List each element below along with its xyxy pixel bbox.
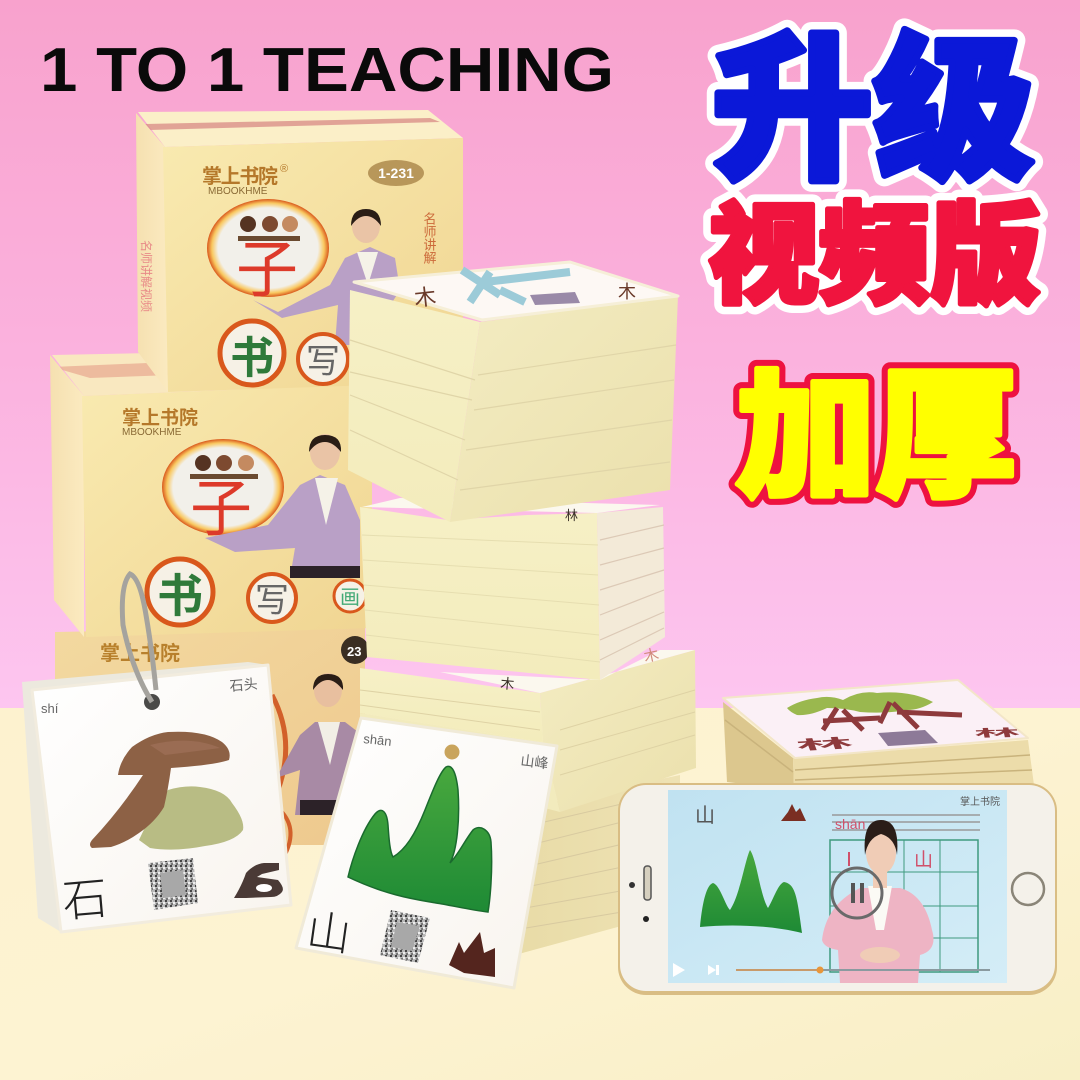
- player controls: [673, 963, 990, 977]
- box: middle product box: [50, 350, 375, 637]
- background: cream table surface: [0, 708, 1080, 1080]
- badge: video edition heading: 视频版: [708, 166, 1041, 326]
- video illustration: mountain: [700, 850, 802, 933]
- badge: thickened heading: 加厚: [735, 325, 1017, 527]
- character circle: 子: [190, 458, 252, 548]
- card stack: second: 林: [565, 505, 578, 524]
- card stack: lowest behind phone: [505, 775, 680, 955]
- QR code: [380, 910, 430, 963]
- flash card: mountain: [296, 718, 557, 988]
- icon: ancient stone glyph: [234, 863, 283, 898]
- phone speaker and camera: [629, 866, 651, 922]
- video screen: 山: [914, 845, 933, 872]
- video screen: 掌上书院: [960, 793, 1000, 808]
- writing grid: [830, 815, 980, 972]
- brand logo: 掌上书院: [122, 403, 198, 430]
- teacher figure: [205, 434, 360, 578]
- picture card on stack: 木: [618, 278, 636, 304]
- pause button: [832, 868, 882, 918]
- title: 1 TO 1 TEACHING: [40, 36, 614, 105]
- small character circles: [220, 321, 348, 386]
- background: pink wall: [0, 0, 1080, 712]
- card stack: second: [360, 498, 665, 680]
- video screen: [668, 790, 1007, 983]
- brand logo: MBOOKHME: [122, 427, 182, 438]
- illustration: mountain: [348, 766, 492, 912]
- box: top product box: [136, 110, 463, 392]
- character circle: [207, 199, 329, 309]
- icon: ancient mountain glyph: [449, 932, 495, 977]
- badge: video edition heading: 视频版: [708, 166, 1041, 326]
- QR code: [148, 858, 198, 910]
- teacher figure on bottom box: [276, 673, 362, 815]
- teacher figure: [253, 209, 400, 345]
- pinyin label: shí: [41, 701, 59, 716]
- phone home button: [1012, 873, 1044, 905]
- presenter: [822, 820, 934, 983]
- small character circles: 书: [230, 322, 274, 386]
- binder hole: [444, 744, 460, 760]
- brand logo: MBOOKHME: [208, 186, 268, 197]
- pinyin label: shān: [363, 731, 392, 749]
- card stack: top with picture card: [348, 262, 678, 522]
- picture card on stack: 木: [412, 279, 438, 313]
- small character circles: 画: [340, 581, 360, 610]
- card stack: third: 木: [500, 673, 515, 694]
- phone showing video lesson: [618, 783, 1057, 995]
- flash card: stone: [22, 662, 291, 932]
- illustration: stone character: [90, 732, 243, 850]
- binder hole: [144, 694, 160, 710]
- box: bottom product box: 掌上书院: [100, 637, 180, 666]
- tree card top: 林: [973, 724, 1022, 740]
- small character circles: 写: [255, 573, 289, 622]
- character circle: [162, 439, 284, 548]
- word label: 石头: [229, 674, 258, 696]
- box: bottom product box: [55, 626, 369, 860]
- brand logo: ®: [280, 163, 288, 175]
- card stack: back right with tree card: [723, 680, 1034, 790]
- tree card top: 林: [793, 733, 856, 754]
- card stack: third: 木: [642, 643, 661, 667]
- card stack: third: [360, 643, 696, 812]
- picture card on stack: [354, 262, 678, 320]
- box: bottom product box: 23: [347, 644, 361, 659]
- small character circles: [147, 559, 366, 626]
- small character circles: 书: [157, 560, 203, 626]
- badge: thickened heading: 加厚: [735, 325, 1017, 527]
- tag: range number: 1-231: [378, 165, 414, 181]
- metal ring: [122, 574, 156, 702]
- video screen: shān: [835, 816, 865, 832]
- video screen: 山: [695, 799, 715, 828]
- word label: 山峰: [519, 750, 550, 773]
- character circle: 子: [236, 219, 298, 309]
- character: mountain: 山: [303, 894, 356, 964]
- brand logo: [202, 160, 288, 197]
- side caption: 名师讲解: [420, 211, 440, 265]
- box: top product box: 名师讲解视频: [138, 240, 155, 312]
- tag: range number: [368, 160, 424, 186]
- brand logo: 掌上书院: [202, 160, 278, 189]
- small character circles: 写: [306, 334, 340, 383]
- tree card top: [723, 680, 1028, 758]
- character: stone: 石: [59, 861, 110, 930]
